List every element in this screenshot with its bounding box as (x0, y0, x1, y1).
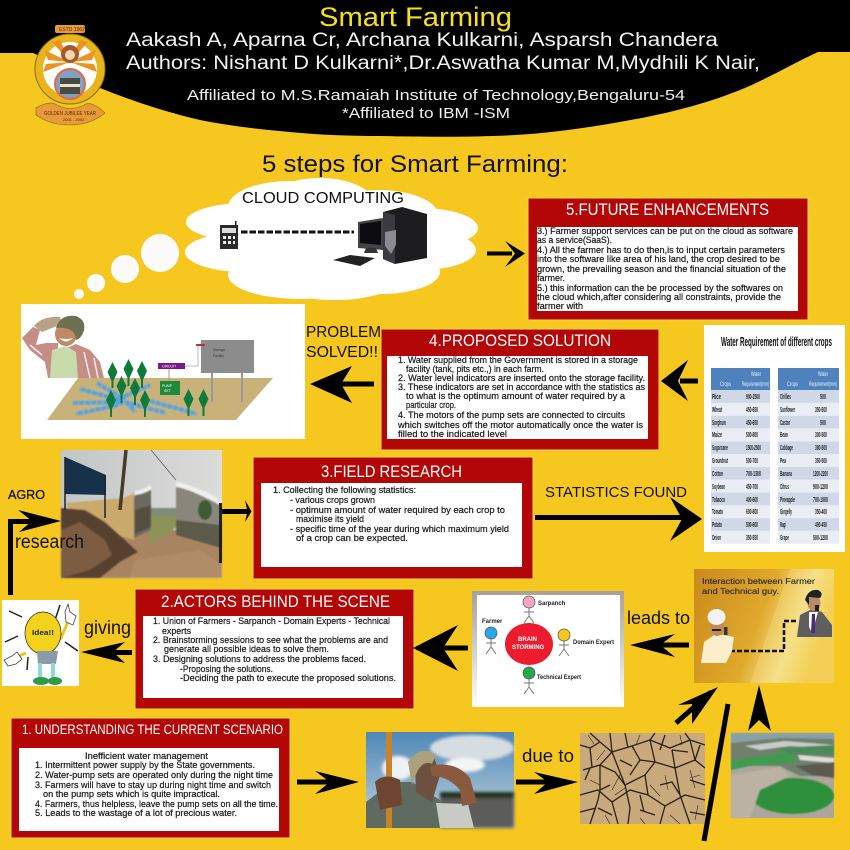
technical guy on phone (797, 590, 832, 637)
label: problem solved: SOLVED!! (306, 344, 378, 361)
circuit and pump: PUMP (162, 384, 173, 388)
table rows: 400-600 (746, 497, 758, 504)
storage tank: Facility (213, 354, 224, 358)
storage tank: Storage (213, 348, 225, 352)
table rows: Cotton (712, 471, 723, 478)
table rows: Pea (780, 458, 786, 465)
logo: institute crest: 2001 - 2002 (63, 117, 85, 122)
text block: current scenario: 4. Farmers, thus helpless, leave the pump sets on all the time. (35, 799, 278, 809)
cloud label: CLOUD COMPUTING (242, 190, 404, 207)
farmer on phone (701, 609, 734, 663)
text block: future enhancements: grown, the prevailing season and the financial situation of the (537, 264, 786, 274)
table rows: 500-600 (746, 522, 758, 529)
table rows: Wheat (712, 407, 722, 414)
table rows: 380-500 (815, 445, 827, 452)
actor: domain expert: Domain Expert (573, 640, 614, 646)
table rows (712, 394, 828, 542)
affiliations: *Affiliated to IBM -ISM (342, 105, 510, 122)
label: problem solved: PROBLEM (306, 324, 381, 341)
logo: institute crest (35, 25, 105, 125)
table rows: 900-2500 (746, 394, 760, 401)
text block: future enhancements: farmer with (537, 301, 583, 311)
arrow: scenario to photo (297, 771, 359, 794)
table rows: 1500-2500 (746, 445, 761, 452)
arrow: flood to interaction (748, 685, 771, 731)
header band (0, 0, 850, 137)
table rows: Onion (712, 535, 721, 542)
arrow: idea to agro research (8, 510, 61, 595)
text block: proposed solution: which switches off the motor automatically once the water is (397, 420, 644, 430)
table rows: 300-500 (815, 432, 827, 439)
field plot (47, 378, 273, 420)
affiliations (187, 87, 685, 122)
table: water requirement of different crops: Water (751, 371, 761, 378)
table rows: 350-500 (815, 407, 827, 414)
table rows: Ragi (780, 522, 786, 529)
table rows: 450-650 (746, 407, 758, 414)
table rows: 500-1200 (813, 535, 828, 542)
table rows: 700-1300 (746, 471, 761, 478)
text block: proposed solution: 4. The motors of the pump sets are connected to circuits (398, 410, 625, 420)
table rows: Rice (712, 394, 721, 401)
panel: 3 field research (253, 457, 533, 579)
table rows: Maize (712, 432, 722, 439)
table rows: 600-800 (746, 509, 758, 516)
text block: proposed solution: 3. These indicators are set in accordance with the statistics as (398, 382, 645, 392)
text block: field research: maximise its yield (296, 514, 364, 524)
table rows: Potato (712, 522, 722, 529)
panel: 4 proposed solution (381, 329, 659, 450)
text block: proposed solution: facility (tank, pits etc.,) in each farm. (406, 364, 544, 374)
label: leads to: leads to (627, 608, 690, 628)
arrow: brainstorming to actors (413, 625, 468, 671)
text block: proposed solution: filled to the indicated level (398, 429, 507, 439)
text block: field research (273, 485, 509, 543)
arrow: actors to idea (81, 642, 132, 663)
actor: farmer: Farmer (482, 619, 503, 625)
label: problem solved (306, 324, 381, 361)
arrow: photo to cracked earth (516, 772, 578, 794)
photo: farmer in dry field (366, 732, 514, 828)
panel: 1 understanding the current scenario (11, 718, 290, 838)
table rows: Grape (780, 535, 789, 542)
affiliations: Affiliated to M.S.Ramaiah Institute of Technology,Bengaluru-54 (187, 87, 685, 104)
arrow: cracked earth to interaction (676, 687, 718, 724)
circuit and pump: SET (164, 389, 172, 393)
diagram: brainstorming: STORMING (512, 645, 545, 651)
table: water requirement of different crops: Water (818, 371, 828, 378)
text block: future enhancements: 3.) Farmer support services can be put on the cloud as software (537, 226, 793, 236)
table: water requirement of different crops (704, 325, 845, 552)
heading: proposed solution: 4.PROPOSED SOLUTION (429, 332, 611, 350)
circuit and pump (158, 346, 198, 395)
actor: domain expert (558, 629, 614, 656)
text block: current scenario: 2. Water-pump sets are operated only during the night time (35, 770, 273, 780)
heading: future enhancements: 5.FUTURE ENHANCEMENTS (566, 201, 769, 219)
water streaks (72, 383, 197, 414)
table: water requirement of different crops: Requirement(mm) (742, 381, 769, 388)
table rows: Gingelly (780, 509, 792, 516)
table rows: 450-650 (746, 420, 758, 427)
text block: future enhancements: 5.) this information can the be processed by the softwares on (537, 283, 783, 293)
text block: future enhancements: 4.) All the farmer has to do then,is to input certain parameters (537, 245, 786, 255)
table rows: Banana (780, 471, 792, 478)
label: statistics found: STATISTICS FOUND (545, 484, 687, 501)
text block: actors: 2. Brainstorming sessions to see what the problems are and (153, 635, 388, 645)
text block: actors: generate all possible ideas to solve them. (164, 644, 329, 654)
text block: actors: -Deciding the path to execute the proposed solutions. (180, 673, 396, 683)
table rows: Sugarcane (712, 445, 728, 452)
text block: proposed solution (397, 355, 645, 439)
text block: current scenario: 3. Farmers will have to stay up during night time and switch (35, 780, 271, 790)
table rows: Groundnut (712, 458, 728, 465)
actor: sarpanch (523, 596, 566, 623)
arrow: photo to field research (222, 500, 252, 522)
caption (702, 577, 815, 596)
actor: technical expert: Technical Expert (537, 675, 581, 681)
actor: sarpanch: Sarpanch (538, 601, 566, 607)
table rows: Chillies (780, 394, 791, 401)
text block: proposed solution: 2. Water level indicators are inserted onto the storage facility. (398, 373, 645, 383)
text block: proposed solution: to what is the optimum amount of water required by a (406, 391, 625, 401)
text block: field research: 1. Collecting the following statistics: (273, 485, 416, 495)
photo: agricultural field gate (61, 450, 222, 578)
table rows: 500 (820, 420, 826, 427)
panel: 2 actors behind the scene (135, 589, 414, 709)
arrow: table to solution (661, 360, 698, 401)
table rows: 450-700 (746, 484, 758, 491)
dashed call line (730, 621, 797, 651)
photo: flooded farmland (731, 733, 834, 818)
panel: 5 future enhancements (528, 198, 808, 320)
table: water requirement of different crops: Crops (787, 381, 798, 388)
arrow: statistics found (535, 497, 702, 541)
table rows: Citrus (780, 484, 789, 491)
text block: current scenario (35, 751, 278, 818)
text block: proposed solution: 1. Water supplied from the Government is stored in a storage (398, 355, 638, 365)
heading: actors: 2.ACTORS BEHIND THE SCENE (161, 593, 390, 611)
text block: future enhancements: into the software like area of his land, the crop desired to be (537, 254, 780, 264)
text block: actors: 3. Designing solutions to address the problems faced. (153, 654, 366, 664)
diagram: brainstorming: BRAIN (518, 637, 537, 643)
table rows: Cabbage (780, 445, 793, 452)
text block: actors: 1. Union of Farmers - Sarpanch - Domain Experts - Technical (153, 616, 390, 626)
text block: future enhancements: the cloud which,after considering all constraints, provide the (537, 292, 781, 302)
text block: current scenario: 1. Intermittent power supply by the State governments. (35, 760, 255, 770)
illustration: idea character (2, 600, 79, 686)
table: water requirement of different crops: Crops (720, 381, 731, 388)
text block: field research: - optimum amount of water required by each crop to (290, 505, 505, 515)
caption: and Technical guy. (702, 587, 779, 596)
table rows: Tobacco (712, 497, 725, 504)
table rows: Soybean (712, 484, 725, 491)
table rows: Sunflower (780, 407, 795, 414)
table rows: 350-550 (746, 535, 758, 542)
arrow: interaction to brainstorming (630, 634, 689, 657)
illustration: idea character: Idea!! (32, 630, 54, 637)
storage tank (196, 340, 254, 402)
icon: desktop computer (333, 207, 427, 266)
table rows: 350-400 (815, 509, 827, 516)
logo: institute crest: ESTD 1962 (59, 27, 85, 33)
actor: farmer (482, 619, 503, 654)
table rows: 400-450 (815, 522, 827, 529)
text block: current scenario: on the pump sets which is quite impractical. (43, 789, 220, 799)
title: Smart Farming (319, 2, 512, 32)
text block: current scenario: Inefficient water management (85, 751, 209, 761)
table rows: 500-800 (746, 432, 758, 439)
text block: field research: - various crops grown (290, 495, 375, 505)
table rows: Pineapple (780, 497, 795, 504)
panel: interaction between farmer and technical guy (694, 569, 834, 683)
table rows: 350-500 (815, 458, 827, 465)
table rows: 900-1200 (813, 484, 828, 491)
authors (126, 30, 760, 74)
text block: future enhancements: farmer. (537, 273, 565, 283)
crop trees (106, 359, 208, 417)
text block: future enhancements (537, 226, 793, 311)
table rows: Castor (780, 420, 790, 427)
table rows: 500 (820, 394, 826, 401)
label: due to: due to (522, 746, 574, 766)
farmer figure (22, 316, 104, 378)
logo: institute crest: GOLDEN JUBILEE YEAR (44, 111, 96, 117)
table rows: 700-1000 (813, 497, 828, 504)
authors: Aakash A, Aparna Cr, Archana Kulkarni, Asparsh Chandera (126, 30, 718, 51)
label: AGRO: AGRO (8, 487, 45, 502)
text block: actors: -Proposing the solutions. (180, 664, 273, 674)
heading: field research: 3.FIELD RESEARCH (321, 463, 462, 481)
text block: current scenario: 5. Leads to the wastage of a lot of precious water. (35, 808, 237, 818)
text block: actors: experts (162, 626, 191, 636)
circuit and pump: CIRCUIT (162, 364, 177, 368)
table: water requirement of different crops: 1200-2200 (813, 471, 828, 478)
authors: Authors: Nishant D Kulkarni*,Dr.Aswatha Kumar M,Mydhili K Nair, (126, 53, 760, 74)
arrow: solution to problem solved (310, 366, 374, 403)
text block: field research: of a crop can be expected. (296, 533, 408, 543)
heading: current scenario: 1. UNDERSTANDING THE CURRENT SCENARIO (22, 722, 283, 737)
table rows: Bean (780, 432, 788, 439)
subheading: 5 steps for Smart Farming: (262, 151, 568, 178)
text block: field research: - specific time of the year during which maximum yield (290, 524, 509, 534)
dashed link (241, 230, 354, 234)
diagram: brainstorming (472, 591, 624, 707)
illustration: farmer and irrigated field (21, 304, 305, 439)
caption: Interaction between Farmer (702, 577, 815, 586)
text block: future enhancements: as a service(SaaS). (537, 235, 612, 245)
label: giving: giving (84, 618, 131, 639)
actor: technical expert (523, 667, 581, 694)
table rows: 500-700 (746, 458, 758, 465)
table rows: Sorghum (712, 420, 726, 427)
text block: proposed solution: particular crop. (406, 400, 456, 410)
arrow: cloud to future enhancements (487, 241, 525, 267)
long arrow shaft (704, 704, 728, 841)
table rows: Tomato (712, 509, 723, 516)
photo: cracked earth (580, 733, 705, 824)
label: research: research (15, 532, 84, 553)
icon: mobile phone (220, 221, 238, 249)
cloud computing bubble (74, 178, 478, 300)
text block: actors (153, 616, 396, 683)
